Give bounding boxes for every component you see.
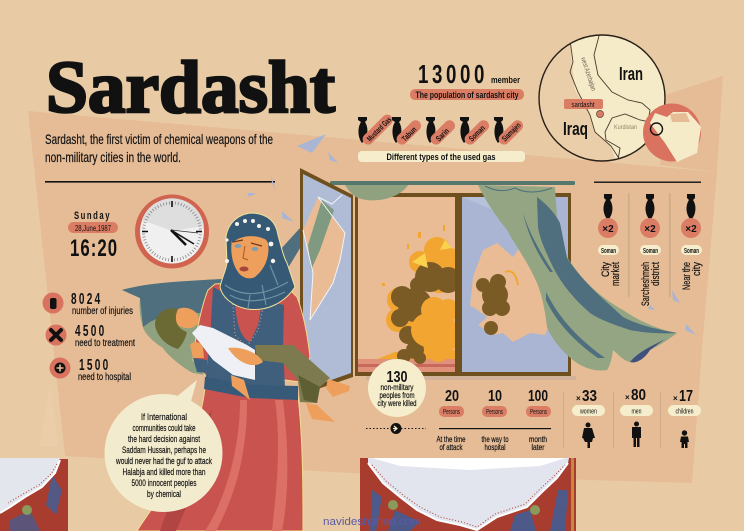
face [231,234,268,278]
map: Kurdistan [614,124,637,131]
stat: injuries: number of injuries [72,306,133,317]
killed callout: 130 [386,369,408,386]
gas: Sarin [426,117,457,147]
skirt [137,388,303,531]
men: men [632,406,642,416]
date block [68,210,118,262]
title: Sardasht [46,47,335,129]
vest [205,287,285,388]
gas: Siamajen [494,117,525,147]
curtain rod [330,181,575,185]
timeline: later [532,442,545,452]
gas types: Different types of the used gas [386,152,496,163]
timeline: 10 [488,388,502,405]
woman [137,213,310,531]
killed callout: city were killed [378,399,416,408]
women: women [579,406,597,416]
map [538,34,666,162]
site: Sarcheshmeh district: Sarcheshmeh [640,262,652,306]
glass shards [247,134,696,335]
stat: hospital [50,356,131,383]
speech bubble: the hard decision against [128,434,200,445]
open window panel [300,168,353,395]
timeline: Persons [443,407,460,416]
killed callout: non-military [380,383,414,392]
killed callout: peoples from [380,391,415,400]
map: Iraq [563,119,588,139]
speech bubble: communities could take [132,423,196,434]
site: near the city: Soman [684,248,699,255]
population: The population of sardasht city [416,90,519,101]
child [155,305,350,422]
right curtain [478,185,677,371]
timeline [436,388,551,452]
bomb sites panel [594,182,703,306]
site: city market: market [610,262,622,286]
timeline: the way to [482,434,509,444]
site: near the city: city [691,262,703,276]
speech bubble: Saddam Hussain, perhaps he [122,445,206,456]
window [355,193,576,380]
men [620,387,653,447]
population: member [491,75,520,85]
mini map [643,104,701,162]
timeline: of attack [440,442,463,452]
watermark: navideshahed.com [323,516,421,528]
speech bubble: Halabja and killed more than [122,467,206,478]
intro text: Sardasht, the first victim of chemical weapons of the [45,131,273,147]
gas: Soman [460,117,491,147]
left valance [345,185,408,200]
gas: Sarin: Sarin [434,126,451,143]
children [668,388,701,448]
date block: 16:20 [70,235,118,262]
women: × [576,394,581,403]
belt [204,377,298,400]
demographics [563,387,701,448]
left curtain tail [122,228,305,375]
stat: injuries [42,290,133,317]
men: × [625,393,630,402]
children: × [673,394,678,403]
site: city market [598,194,622,286]
timeline: month [529,434,547,444]
broken glass [470,240,560,342]
killed callout [368,359,426,417]
timeline: Persons [486,407,503,416]
timeline arrow [366,423,426,434]
timeline: 20 [445,388,459,405]
gas: Siamajen: Siamajen [500,121,523,143]
intro text: non-military cities in the world. [45,149,181,165]
children: 17 [679,388,693,405]
speech bubble [104,380,222,512]
site: near the city: ×2 [685,224,697,235]
gas types [358,112,525,163]
site: city market: Soman [601,248,616,255]
stat: hospital: need to hospital [78,372,131,383]
right table [360,458,576,531]
map: Iran [619,64,643,84]
speech bubble: 5000 innocent peoples [132,478,197,489]
sleeves [193,280,310,382]
scarf [220,213,295,310]
map: west Azerbaijan [579,56,597,92]
date block: Sunday [74,210,111,222]
site: Sarcheshmeh district: ×2 [644,224,656,235]
site: city market: City [600,262,612,277]
date block: 28,June,1987 [75,224,111,233]
stat: treatment: 4500 [75,322,107,340]
gas: Tabun [392,117,423,147]
men: 80 [631,387,646,404]
gas: Mustard Gas: Mustard Gas [365,115,394,143]
site: near the city: Near the [681,262,693,290]
site: near the city [681,194,703,290]
women [572,388,605,448]
site: city market: ×2 [602,224,614,235]
gas: Tabun: Tabun [400,125,418,143]
population: 13000 [418,59,488,89]
timeline: Persons [530,407,547,416]
timeline: At the time [436,434,466,444]
stat: treatment [46,322,135,349]
timeline: hospital [484,442,506,452]
speech bubble: would never had the guf to attack [115,456,212,467]
gas: Soman: Soman [467,124,487,143]
site: Sarcheshmeh district [640,194,662,306]
clock [135,194,209,268]
map: sardasht [572,102,595,109]
timeline: 100 [528,388,548,405]
intro text [45,131,273,165]
gas: Mustard Gas [358,112,395,147]
stat: hospital: 1500 [79,356,111,374]
women: 33 [582,388,597,405]
population [410,59,524,101]
speech bubble: by chemical [147,489,181,500]
site: Sarcheshmeh district: Soman [643,248,658,255]
stat: treatment: need to treatment [75,338,135,349]
explosion [358,193,461,376]
children: children [676,406,694,416]
stat: injuries: 8024 [71,290,103,308]
site: Sarcheshmeh district: district [650,262,662,286]
speech bubble: If International [141,412,187,423]
left table [0,458,68,531]
